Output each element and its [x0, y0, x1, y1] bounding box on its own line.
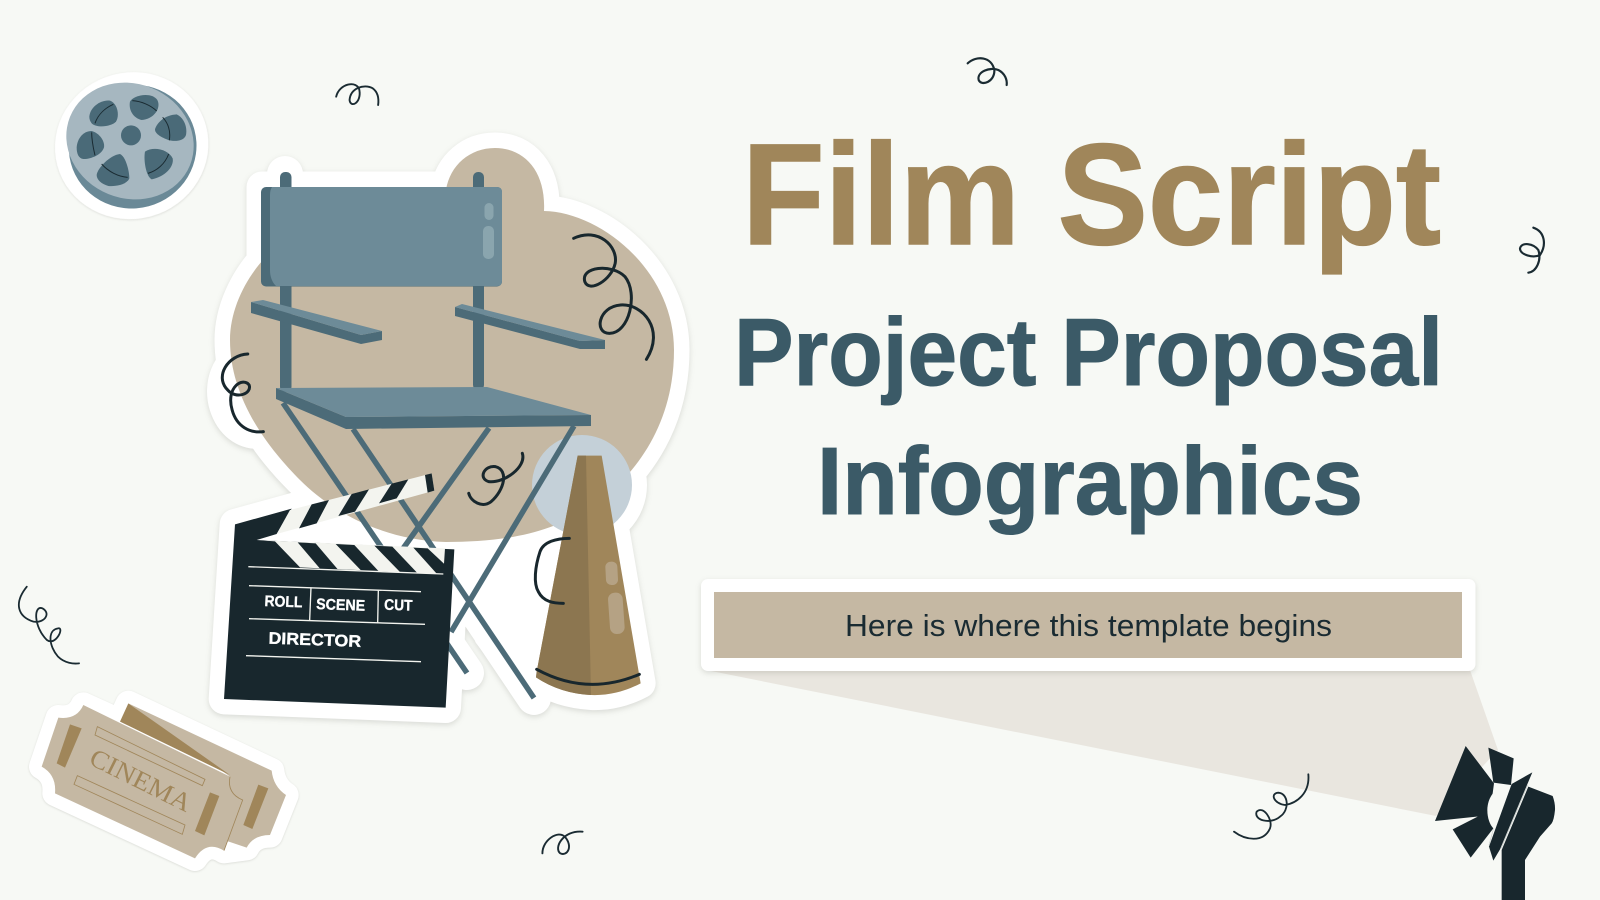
clapper labels: SCENE	[316, 596, 365, 615]
front ticket	[42, 705, 243, 858]
icon: director's chair	[251, 172, 605, 698]
lower striped bar	[257, 540, 445, 574]
clapper labels: DIRECTOR	[268, 629, 361, 651]
icon: film reel sticker	[38, 55, 225, 236]
megaphone cone	[536, 456, 641, 695]
beige blob behind chair	[230, 148, 674, 542]
chair posts	[280, 172, 484, 392]
chair back	[261, 187, 502, 286]
ticket white outline	[42, 703, 286, 858]
decorative curl: bottom centre	[542, 832, 583, 854]
curl: right of chair	[574, 235, 653, 359]
decorative curl: top centre	[968, 58, 1007, 85]
back ticket	[128, 703, 286, 848]
megaphone rim line	[537, 669, 639, 684]
chair legs	[283, 403, 574, 698]
megaphone highlights	[605, 561, 618, 585]
clapper labels: ROLL	[264, 593, 303, 611]
subtitle line: Project Proposal: Project Proposal	[734, 299, 1443, 406]
icon: clapperboard	[224, 473, 454, 708]
curl: under seat	[469, 453, 523, 504]
banner: template tagline: Here is where this template begins	[845, 608, 1332, 643]
clapper lines	[246, 567, 443, 662]
decorative curl: right edge	[1520, 228, 1544, 273]
ticket label: CINEMA	[85, 743, 197, 818]
chair seat	[276, 387, 591, 429]
sticker outlines: white backing	[224, 148, 674, 708]
curl: left of chair	[222, 354, 263, 432]
decorative curl: top left	[336, 84, 378, 105]
spotlight beam	[706, 670, 1498, 816]
clapper labels	[264, 593, 413, 651]
decorative curl: beam lower edge	[1234, 774, 1308, 839]
clapper body	[224, 509, 454, 708]
title: Film Script: Film Script	[742, 114, 1441, 275]
upper striped arm	[277, 473, 434, 534]
decorative curl: left edge	[19, 587, 79, 664]
chair armrests	[251, 300, 605, 349]
clapper labels: CUT	[384, 597, 413, 615]
megaphone handle	[535, 538, 569, 603]
subtitle line: Infographics: Infographics	[817, 428, 1363, 535]
pale circle behind megaphone	[532, 435, 632, 535]
icon: cinema tickets	[42, 703, 286, 858]
icon: megaphone	[535, 456, 641, 695]
icon: spotlight lamp	[1435, 746, 1555, 900]
banner: template tagline	[701, 579, 1476, 671]
